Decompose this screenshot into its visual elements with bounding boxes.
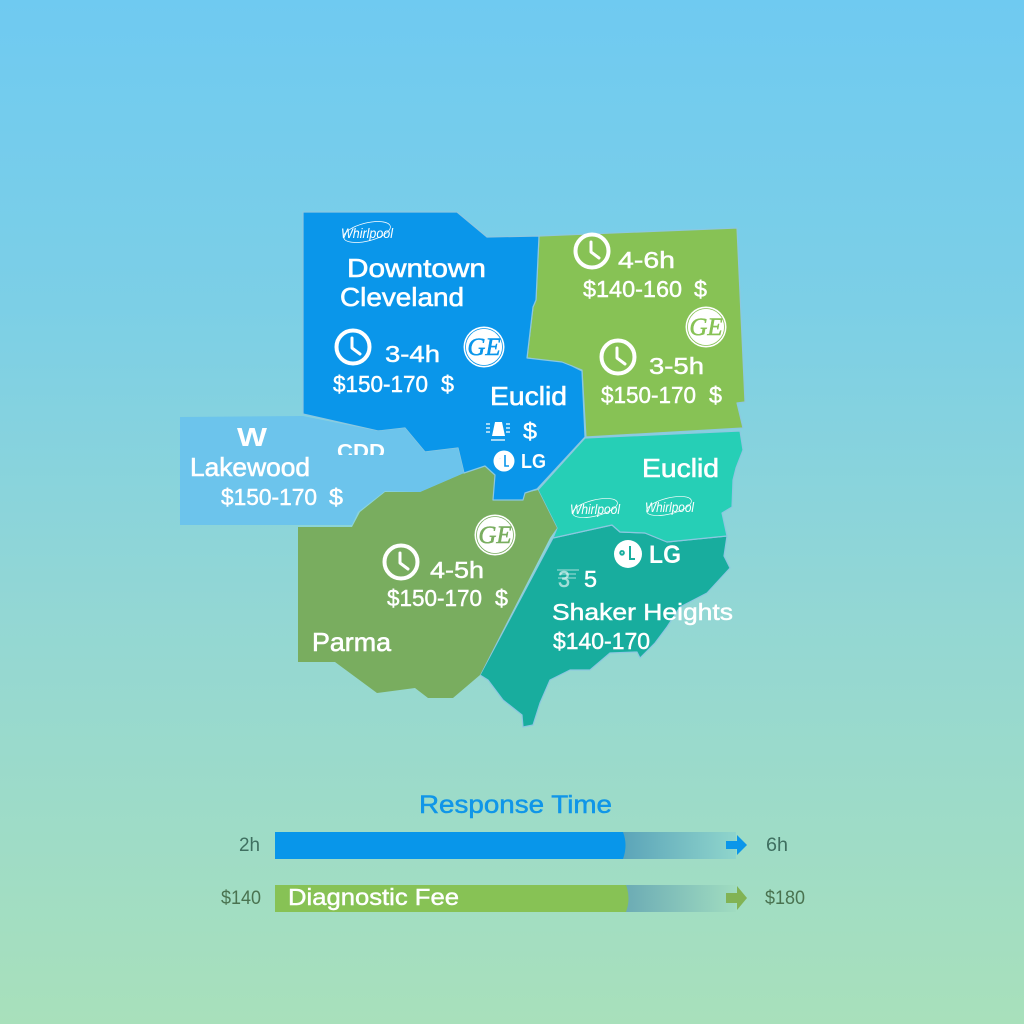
icon: GE logo: GE bbox=[467, 334, 501, 361]
response time scale bbox=[239, 832, 788, 859]
legend bbox=[221, 791, 805, 912]
icon: LG logo: LG bbox=[521, 451, 546, 473]
region: Parma bbox=[298, 466, 557, 698]
region: Euclid east bbox=[538, 431, 743, 542]
logo: Whirlpool: Whirlpool bbox=[341, 226, 394, 241]
fee range: $150-170 bbox=[221, 484, 317, 510]
region: Downtown Cleveland bbox=[303, 212, 585, 500]
fee symbol: $ bbox=[523, 418, 537, 444]
fee range: $140-160 bbox=[583, 276, 682, 302]
region name: Lakewood: Lakewood bbox=[190, 452, 310, 482]
map of service regions bbox=[180, 212, 745, 727]
fee range: $ bbox=[694, 276, 707, 302]
icon: LG logo bbox=[614, 540, 681, 569]
logo: Whirlpool: Whirlpool bbox=[645, 500, 695, 515]
icon: garbled response icon: 3 bbox=[558, 566, 570, 592]
diagnostic fee scale: $140 bbox=[221, 888, 261, 909]
region name: Downtown Cleveland: Downtown bbox=[347, 253, 486, 283]
fee range: $ bbox=[495, 585, 508, 611]
fee range: $150-170 bbox=[601, 382, 696, 408]
icon: GE logo bbox=[686, 306, 726, 348]
region name: Euclid: Euclid bbox=[642, 453, 719, 483]
response time: 3-5h bbox=[649, 353, 704, 379]
fee range: $ bbox=[709, 382, 722, 408]
icon: garbled appliance bbox=[486, 422, 510, 440]
region name: Euclid: Euclid bbox=[490, 381, 567, 411]
diagnostic fee scale: $180 bbox=[765, 888, 805, 909]
icon: clock bbox=[602, 340, 634, 374]
region name: Shaker Heights: Shaker Heights bbox=[552, 599, 733, 625]
region name: Parma: Parma bbox=[312, 627, 392, 657]
logo: Whirlpool bbox=[341, 217, 394, 247]
icon: clock bbox=[384, 546, 418, 578]
response time: 5 bbox=[584, 566, 597, 592]
fee range: $140-170 bbox=[553, 628, 650, 654]
response time: 3-4h bbox=[385, 341, 440, 367]
region name: Downtown Cleveland: Cleveland bbox=[340, 282, 464, 312]
diagnostic fee scale bbox=[221, 884, 805, 912]
fee range: $ bbox=[329, 484, 343, 510]
icon: GE logo: GE bbox=[689, 314, 723, 341]
logo: Whirlpool: Whirlpool bbox=[570, 502, 621, 517]
legend title: Response Time bbox=[419, 791, 612, 819]
logo: Whirlpool bbox=[645, 493, 695, 519]
icon: GE logo bbox=[464, 326, 504, 368]
response time scale: 2h bbox=[239, 835, 260, 856]
icon: GE logo: GE bbox=[478, 522, 512, 549]
region: Shaker Heights bbox=[480, 525, 733, 727]
logo: W: W bbox=[237, 422, 268, 452]
response time: 4-6h bbox=[618, 247, 675, 273]
icon: garbled response icon bbox=[557, 566, 579, 592]
icon: GE logo bbox=[474, 514, 516, 556]
diagnostic fee scale: Diagnostic Fee bbox=[288, 884, 459, 910]
icon: clock bbox=[576, 234, 608, 268]
logo: Whirlpool bbox=[570, 495, 621, 521]
icon: LG logo bbox=[494, 450, 546, 473]
response time: 4-5h bbox=[430, 557, 484, 583]
icon: clock bbox=[336, 330, 370, 364]
response time scale: 6h bbox=[766, 835, 788, 856]
region name: Downtown Cleveland bbox=[340, 253, 486, 312]
fee range: $ bbox=[441, 371, 454, 397]
logo: clipped letters: CDD bbox=[337, 441, 385, 463]
icon: LG logo: LG bbox=[649, 541, 681, 569]
fee range: $150-170 bbox=[333, 371, 428, 397]
fee range: $150-170 bbox=[387, 585, 482, 611]
region: Lakewood bbox=[180, 416, 464, 525]
region: Northeast green bbox=[527, 228, 745, 437]
